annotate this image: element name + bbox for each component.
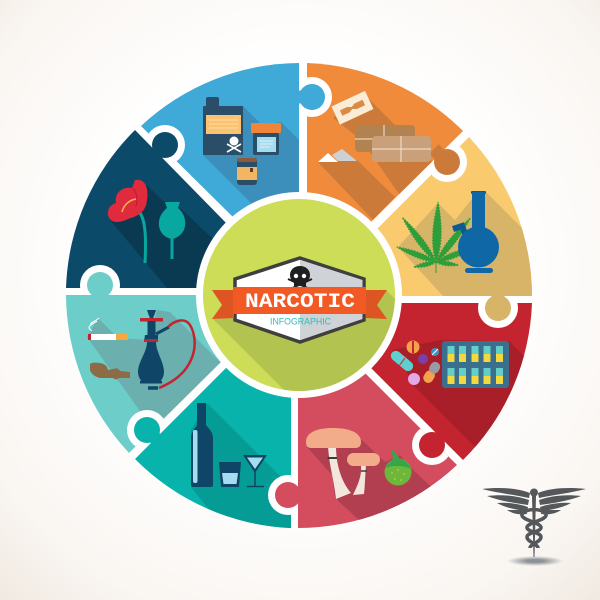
icon: martini glass (243, 455, 267, 486)
ribbon with title: NARCOTIC (245, 291, 355, 314)
panel: cannabis and bong (372, 137, 540, 296)
puzzle knob: teal (127, 410, 164, 446)
panel: alcohol (135, 362, 291, 530)
panel: centre badge (203, 199, 400, 406)
panel: mushrooms (298, 369, 457, 530)
icon: mushrooms (306, 428, 380, 499)
icon: green fruit (384, 449, 412, 486)
icon: wrapped bricks (355, 125, 431, 162)
icon: bottle (191, 403, 213, 487)
icon: loose pills (389, 340, 442, 385)
puzzle knob: yellow (478, 296, 518, 328)
icon: cigarette (88, 318, 128, 340)
icon: powder piles (318, 149, 357, 162)
panel: pills (371, 303, 532, 460)
puzzle knob: light teal (80, 265, 120, 295)
icon: skull and crossbones (288, 266, 312, 290)
icon: poppy flower and pod (108, 180, 185, 263)
panel: powder and razor (307, 63, 475, 227)
ribbon with title (233, 287, 366, 314)
panel: tobacco and hookah (66, 295, 221, 453)
wheel base (66, 62, 532, 528)
puzzle knob: navy (148, 125, 185, 162)
puzzle knob: blue (299, 77, 332, 117)
puzzle knob: orange (431, 144, 467, 182)
puzzle knob: red (412, 428, 448, 465)
subtitle: INFOGRAPHIC (270, 316, 331, 328)
ribbon tail: right (366, 290, 387, 319)
icon: bong (453, 191, 499, 273)
puzzle knob: pink (268, 475, 298, 515)
icon: poison containers (203, 97, 281, 185)
panel: poppy (66, 130, 231, 288)
white ring around centre (196, 192, 402, 398)
icon: caduceus (482, 488, 586, 566)
icon: blister pack (442, 341, 509, 388)
icon: hashish pieces (90, 363, 130, 380)
icon: cannabis leaf (396, 202, 476, 273)
icon: hookah (138, 310, 195, 388)
icon: razor blade (331, 91, 373, 125)
ribbon tail: left (212, 290, 234, 319)
badge hexagon (235, 258, 364, 342)
panel: chemicals (141, 63, 299, 222)
icon: glass (219, 462, 241, 487)
